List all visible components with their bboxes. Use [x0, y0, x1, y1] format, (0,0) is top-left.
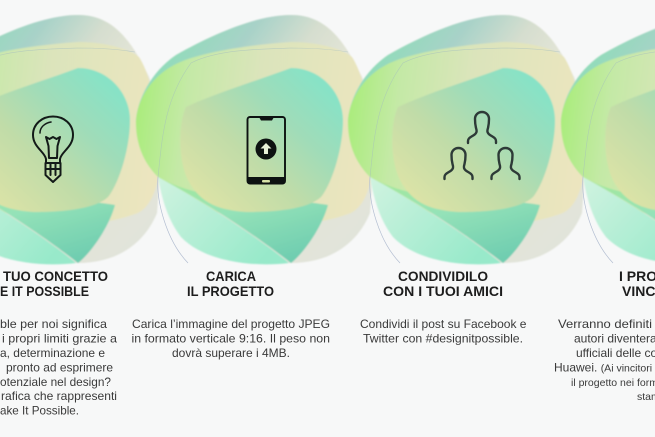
blob: step 2 background [136, 15, 372, 264]
text block: step 4: Verranno definiti [558, 317, 652, 331]
blob: step 1 background [0, 15, 159, 264]
heading: step 2 [187, 268, 274, 299]
icon: three connected people [444, 112, 520, 179]
text block: step 2: Carica l’immagine del progetto JPEG [132, 317, 330, 331]
text block: step 3 [360, 317, 527, 346]
text block: step 3: Twitter con #designitpossible. [363, 332, 523, 346]
heading: step 2: IL PROGETTO [187, 283, 274, 299]
text block: step 1: i propri limiti grazie a [2, 332, 117, 346]
text block: step 2: dovrà superare i 4MB. [172, 346, 290, 360]
heading: step 3: CONDIVIDILO [398, 268, 488, 284]
heading: step 4 [619, 268, 655, 299]
heading: step 1 [0, 268, 108, 299]
text block: step 1: ake It Possible. [0, 404, 79, 418]
heading: step 2: CARICA [206, 268, 256, 284]
icon: light bulb [33, 116, 73, 182]
text block: step 2: in formato verticale 9:16. Il peso non [132, 332, 330, 346]
text block: step 1: pronto ad esprimere [6, 360, 113, 374]
text block: step 4: Huawei. (Ai vincitori [554, 360, 652, 374]
heading: step 1: E IT POSSIBLE [0, 283, 89, 299]
heading: step 3 [383, 268, 503, 299]
text block: step 3: Condividi il post su Facebook e [360, 317, 527, 331]
heading: step 1: TUO CONCETTO [3, 268, 108, 284]
blob: step 3 background [348, 15, 584, 264]
text block: step 1: a, determinazione e [0, 346, 105, 360]
text block: step 1: ble per noi significa [0, 317, 107, 331]
blob: step 4 background [561, 15, 655, 264]
text block: step 4 [554, 317, 655, 403]
text block: step 1: rafica che rappresenti [1, 389, 117, 403]
text block: step 1: otenziale nel design? [0, 375, 111, 389]
icon: smartphone with upload arrow [247, 117, 286, 184]
text block: step 1 [0, 317, 117, 418]
heading: step 3: CON I TUOI AMICI [383, 283, 503, 299]
text block: step 2 [132, 317, 330, 360]
